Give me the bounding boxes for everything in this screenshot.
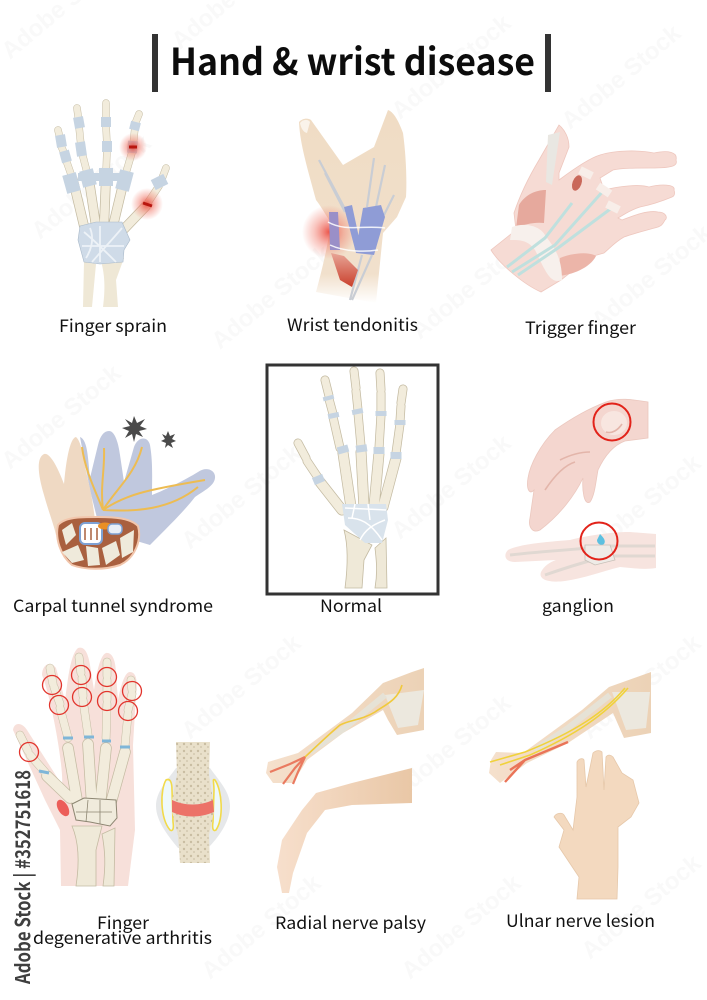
background watermark: Adobe Stock xyxy=(177,629,307,745)
sprain glow xyxy=(119,133,147,161)
label: Carpal tunnel syndrome xyxy=(13,592,213,617)
panel: normal xyxy=(267,365,438,617)
icon: claw hand xyxy=(554,751,639,899)
background watermark: Adobe Stock xyxy=(407,229,537,345)
label: Ulnar nerve lesion xyxy=(506,907,655,932)
frame xyxy=(267,365,438,594)
background watermark: Adobe Stock xyxy=(577,629,707,745)
panel: finger degenerative arthritis xyxy=(13,648,230,949)
label: Finger xyxy=(97,909,149,934)
label: Normal xyxy=(320,592,382,617)
background watermark: Adobe Stock xyxy=(387,429,517,545)
panel: wrist tendonitis xyxy=(287,110,418,336)
icon: wrist with inflamed tendon xyxy=(299,110,406,303)
label: Radial nerve palsy xyxy=(275,909,426,934)
label xyxy=(33,909,212,949)
icon: joint cross-section xyxy=(156,742,230,863)
title: Hand & wrist disease xyxy=(170,32,535,86)
label: ganglion xyxy=(542,592,614,617)
background watermark: Adobe Stock xyxy=(207,239,337,355)
panel: finger sprain xyxy=(58,103,167,337)
sprain glow xyxy=(131,188,163,220)
background watermark: Adobe Stock xyxy=(197,869,327,985)
background watermark: Adobe Stock xyxy=(397,869,527,985)
icon: back of hand with cyst xyxy=(527,399,648,531)
background watermark: Adobe Stock xyxy=(387,689,517,805)
icon: skeletal hand with sprained joints xyxy=(58,103,166,307)
stock id vertical text: Adobe Stock | #352751618 xyxy=(7,770,36,985)
callout circle lower xyxy=(580,522,618,560)
panel: trigger finger xyxy=(491,125,676,339)
label: Finger sprain xyxy=(59,312,167,337)
background watermark: Adobe Stock xyxy=(387,9,517,125)
background watermark: Adobe Stock xyxy=(0,359,127,475)
icon: arm with radial nerve xyxy=(266,668,424,784)
label: Wrist tendonitis xyxy=(287,311,418,336)
background watermark: Adobe Stock xyxy=(577,449,707,565)
icon: side hand skeleton with cyst xyxy=(505,532,656,582)
panel: radial nerve palsy xyxy=(266,668,426,934)
callout circle upper xyxy=(594,404,630,440)
icon: palm with pulley and tendons xyxy=(491,125,676,292)
callout circles: affected joints xyxy=(20,666,142,762)
label: Trigger finger xyxy=(525,314,636,339)
icon: hand with median nerve xyxy=(39,431,215,569)
background watermark: Adobe Stock xyxy=(577,849,707,965)
icon: arm with ulnar nerve xyxy=(489,672,651,783)
panel: ganglion xyxy=(505,399,656,617)
panel: carpal tunnel syndrome xyxy=(13,416,215,617)
background watermark: Adobe Stock xyxy=(177,439,307,555)
background watermark: Adobe Stock xyxy=(27,129,157,245)
label: degenerative arthritis xyxy=(33,924,212,949)
icon: normal skeletal hand xyxy=(298,371,403,588)
icon: pain star large xyxy=(122,416,147,442)
icon: arthritic hand skeleton xyxy=(13,648,137,886)
background watermark: Adobe Stock xyxy=(557,19,687,135)
icon: pain star small xyxy=(161,431,176,448)
panel: ulnar nerve lesion xyxy=(489,672,655,932)
icon: wrist drop xyxy=(277,768,412,893)
